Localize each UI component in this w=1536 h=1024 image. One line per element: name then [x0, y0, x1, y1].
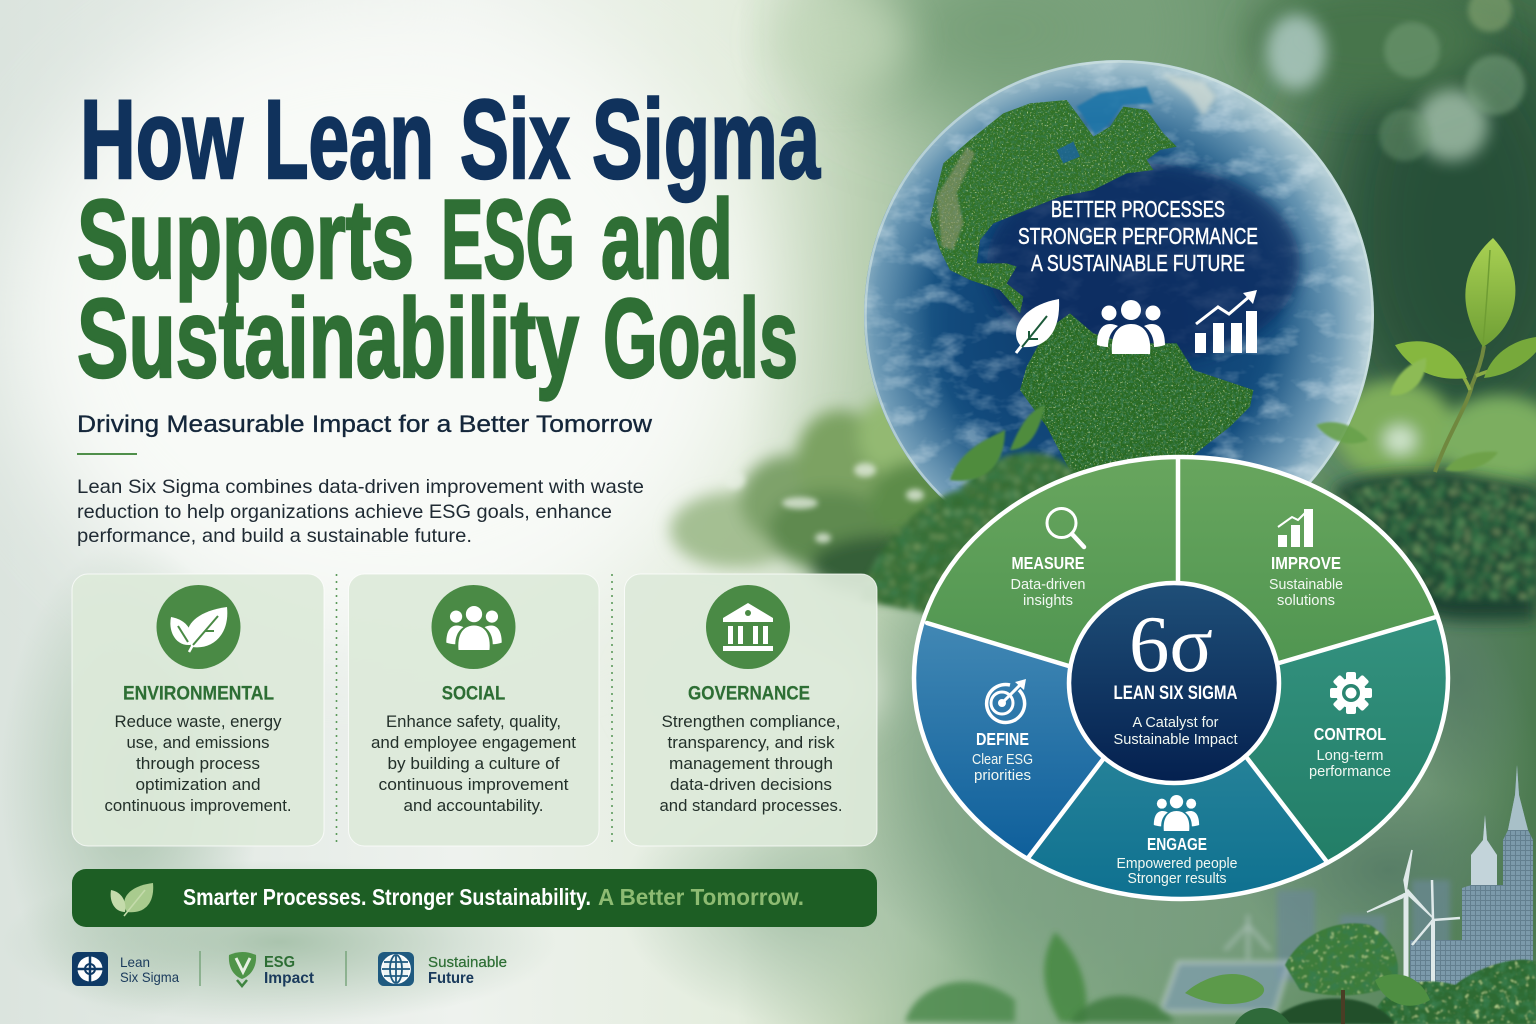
- title: and: [601, 177, 733, 302]
- panel: Social: and employee engagement: [371, 733, 576, 752]
- label: Improve: solutions: [1277, 593, 1335, 609]
- panel: Environmental: through process: [136, 754, 260, 773]
- title: ESG: [441, 177, 575, 302]
- deep water behind caption: [987, 163, 1300, 363]
- label: Control: [1309, 672, 1391, 780]
- label: Measure: insights: [1023, 593, 1073, 609]
- label: Control: CONTROL: [1314, 724, 1386, 744]
- title: Lean: [264, 77, 434, 202]
- footer: Sustainable Future: Sustainable: [428, 955, 507, 971]
- footer: ESG Impact: ESG: [264, 954, 295, 971]
- panel: Social: SOCIAL: [442, 682, 505, 704]
- footer: Lean Six Sigma: Lean: [120, 954, 150, 970]
- banner: A Better Tomorrow.: [598, 884, 804, 910]
- rim light: [866, 62, 1372, 568]
- intro paragraph: reduction to help organizations achieve ESG goals, enhance: [77, 501, 612, 523]
- panel: Governance: data-driven decisions: [670, 775, 832, 794]
- panel: Social: continuous improvement: [378, 775, 569, 794]
- panel: Governance: and standard processes.: [660, 796, 842, 815]
- segment: Engage: [1030, 760, 1324, 897]
- wheel centre: Sustainable Impact: [1114, 732, 1238, 748]
- blurred foliage left of globe: [670, 397, 970, 595]
- title: Sustainability: [77, 276, 579, 401]
- sprout: [1316, 238, 1536, 472]
- label: Improve: Sustainable: [1269, 577, 1343, 593]
- icon: institution: [706, 585, 790, 669]
- panel: Governance: Strengthen compliance,: [662, 712, 840, 731]
- icon: leaves: [156, 585, 240, 669]
- title: Six: [460, 77, 570, 202]
- label: Measure: MEASURE: [1012, 553, 1084, 573]
- label: Improve: IMPROVE: [1271, 553, 1341, 573]
- banner: [72, 869, 877, 927]
- panel: Environmental: [72, 574, 324, 846]
- label: Engage: ENGAGE: [1147, 834, 1207, 854]
- label: Measure: Data-driven: [1010, 577, 1086, 593]
- title: Sigma: [592, 77, 820, 202]
- subtitle: Driving Measurable Impact for a Better Tomorrow: [77, 411, 652, 438]
- globe caption: STRONGER PERFORMANCE: [1018, 223, 1258, 249]
- foreground plants: [905, 923, 1536, 1024]
- panel: Environmental: continuous improvement.: [104, 796, 292, 815]
- segment: Define: [916, 622, 1101, 856]
- panel: Governance: transparency, and risk: [668, 733, 835, 752]
- label: Engage: [1116, 795, 1238, 887]
- panel: Environmental: optimization and: [136, 775, 260, 794]
- globe caption: A SUSTAINABLE FUTURE: [1031, 250, 1245, 276]
- label: Measure: [1010, 508, 1086, 609]
- panel: Social: Enhance safety, quality,: [386, 712, 561, 731]
- wheel centre: LEAN SIX SIGMA: [1114, 682, 1238, 704]
- panel: Environmental: ENVIRONMENTAL: [123, 682, 274, 704]
- icon: people: [432, 585, 516, 669]
- title: Supports: [77, 177, 414, 302]
- foliage at the foot of the globe: [860, 405, 1536, 621]
- panel: Social: [348, 574, 599, 846]
- panel: Governance: GOVERNANCE: [688, 682, 810, 704]
- segment: Measure: [925, 459, 1176, 664]
- title: Goals: [603, 276, 798, 401]
- icon: people: [1097, 300, 1165, 354]
- wheel centre: A Catalyst for: [1132, 715, 1219, 731]
- label: Define: DEFINE: [976, 729, 1029, 749]
- globe caption: BETTER PROCESSES: [1051, 196, 1225, 222]
- label: Define: [972, 679, 1033, 784]
- footer: ESG Impact: [229, 952, 314, 987]
- title: How: [80, 77, 244, 202]
- panel: Governance: management through: [669, 754, 833, 773]
- continent: North America: [930, 100, 1177, 313]
- wheel centre: 6σ: [1129, 601, 1213, 689]
- globe caption: [1018, 196, 1258, 276]
- icon: leaf: [1016, 299, 1059, 353]
- label: Define: priorities: [974, 768, 1031, 784]
- label: Define: Clear ESG: [972, 752, 1033, 768]
- bokeh lights: [1266, 14, 1326, 90]
- blurred leaves right of globe: [1335, 380, 1536, 485]
- panel: Governance: [624, 574, 877, 846]
- title: [77, 77, 820, 401]
- label: Improve: [1269, 509, 1343, 609]
- city skyline and turbines: [1160, 765, 1533, 1012]
- panel: Environmental: Reduce waste, energy: [114, 712, 282, 731]
- icon: growth chart: [1195, 290, 1257, 353]
- footer: Sustainable Future: [378, 952, 507, 987]
- footer: Lean Six Sigma: Six Sigma: [120, 969, 179, 985]
- label: Engage: Stronger results: [1128, 871, 1226, 887]
- intro paragraph: [77, 476, 644, 547]
- label: Control: performance: [1309, 764, 1391, 780]
- footer: Sustainable Future: Future: [428, 970, 474, 987]
- label: Engage: Empowered people: [1116, 856, 1238, 872]
- segment: Control: [1248, 619, 1446, 860]
- segment: Improve: [1180, 459, 1434, 661]
- panel: Environmental: use, and emissions: [126, 733, 270, 752]
- panel: Social: by building a culture of: [388, 754, 560, 773]
- intro paragraph: Lean Six Sigma combines data-driven improvement with waste: [77, 476, 644, 498]
- process wheel: [900, 440, 1460, 910]
- footer: ESG Impact: Impact: [264, 970, 314, 987]
- globe: [864, 60, 1374, 500]
- label: Control: Long-term: [1316, 748, 1384, 764]
- hazes: [0, 540, 260, 1024]
- icon: banner leaves: [111, 883, 153, 916]
- footer: Lean Six Sigma: [72, 952, 179, 986]
- banner: Smarter Processes. Stronger Sustainability.: [183, 884, 591, 910]
- wheel centre: [1069, 583, 1279, 783]
- continent: South America: [1020, 313, 1253, 483]
- intro paragraph: performance, and build a sustainable future.: [77, 525, 472, 547]
- panel: Social: and accountability.: [404, 796, 544, 815]
